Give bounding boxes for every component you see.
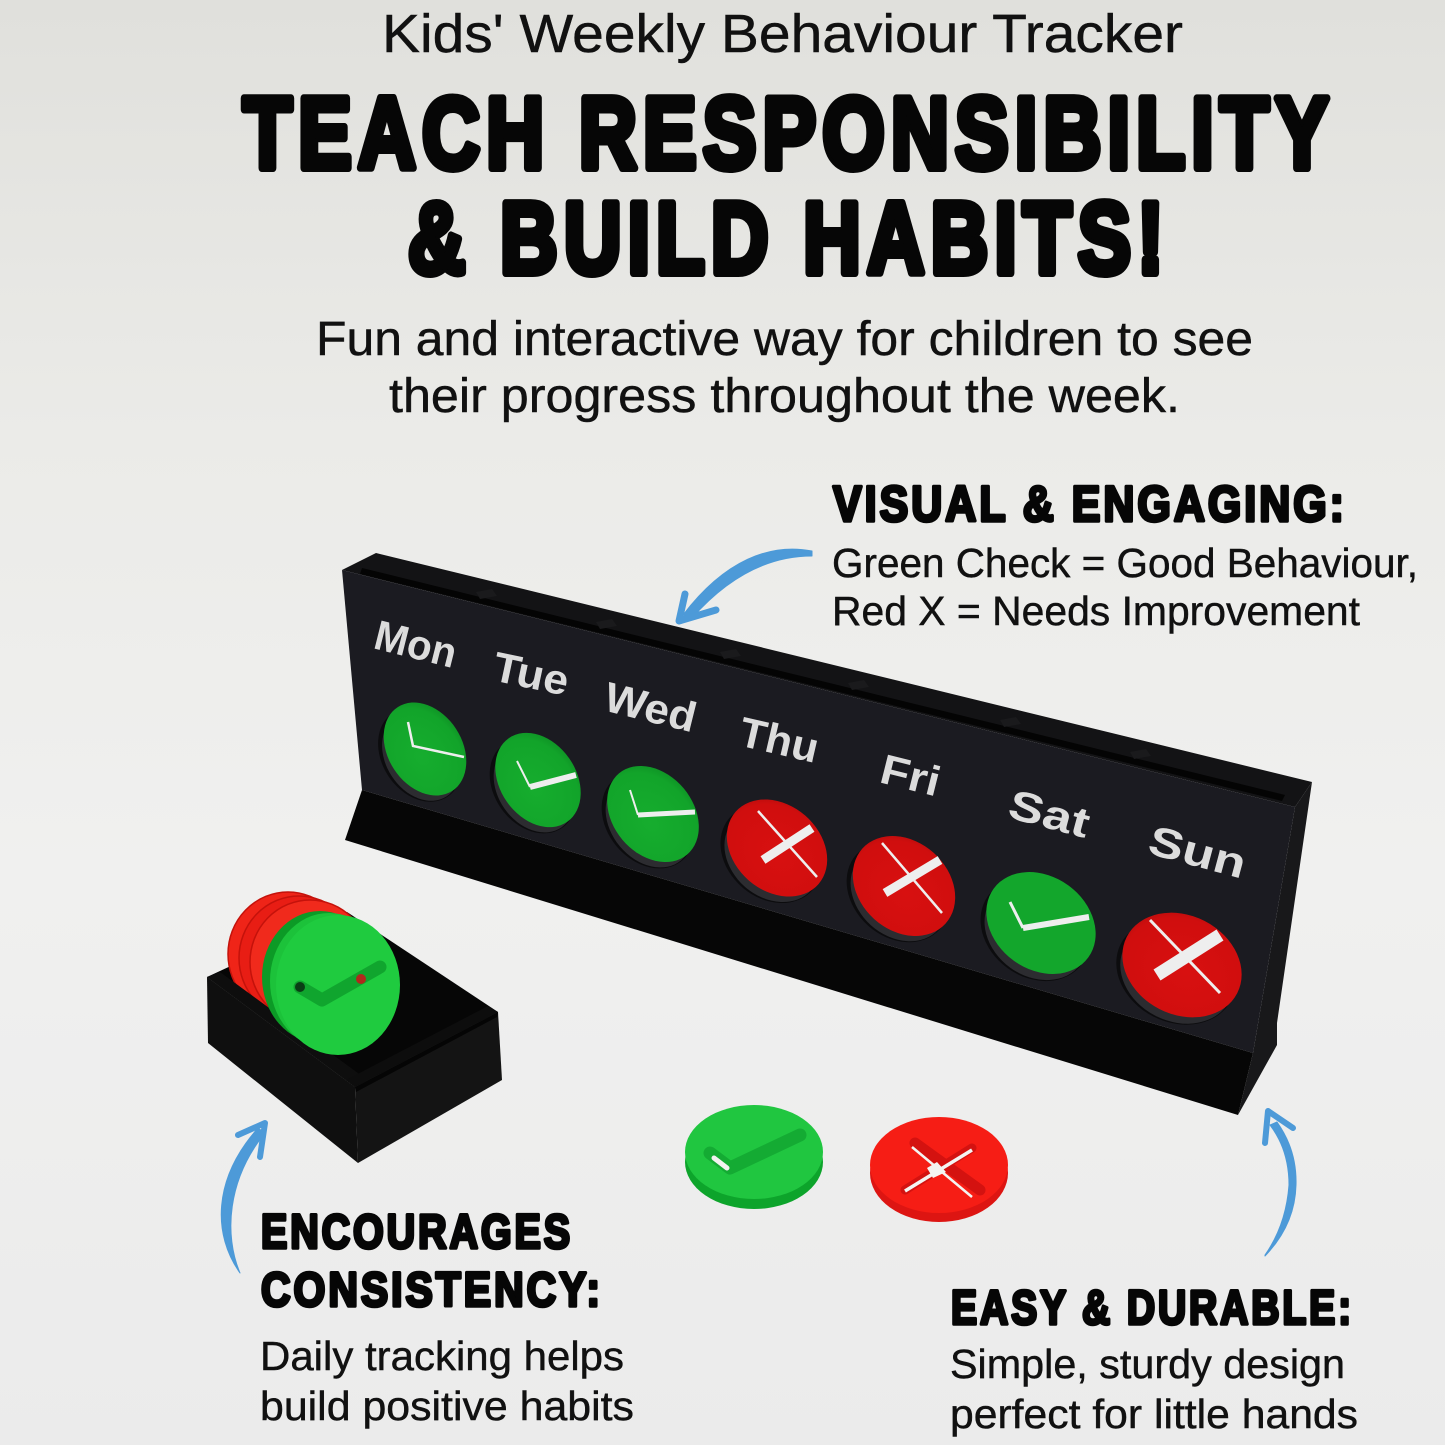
eyebrow heading: Kids' Weekly Behaviour Tracker (382, 4, 1183, 64)
main title (243, 78, 1335, 295)
disc: Tue check (472, 716, 598, 850)
green disc stack (262, 911, 400, 1055)
callout: easy and durable (950, 1282, 1358, 1437)
callout: visual and engaging: Red X = Needs Improvement (832, 588, 1361, 634)
subtitle: their progress throughout the week. (389, 370, 1180, 423)
arrow: to board top (679, 549, 812, 621)
callout: encourages consistency (260, 1206, 634, 1429)
token tray with stacked discs (207, 892, 502, 1163)
day labels: Sun (1144, 816, 1251, 887)
callout: visual and engaging: Green Check = Good Behaviour, (832, 540, 1418, 586)
disc: Sat check (960, 851, 1116, 1002)
day labels: Sat (1004, 780, 1095, 847)
day labels: Fri (876, 745, 945, 805)
subtitle: Fun and interactive way for children to see (316, 313, 1253, 366)
main title: & BUILD HABITS! (408, 183, 1170, 295)
disc: Fri cross (826, 815, 975, 963)
loose green check token (685, 1105, 823, 1209)
subtitle (316, 313, 1253, 423)
red disc stack (228, 892, 370, 1024)
callout: encourages consistency: CONSISTENCY: (261, 1264, 603, 1317)
callout: encourages consistency: build positive habits (260, 1383, 634, 1429)
callout: encourages consistency: Daily tracking helps (260, 1333, 624, 1379)
day labels: Wed (600, 673, 701, 741)
arrow: to tray (221, 1123, 265, 1273)
callout: easy and durable: EASY & DURABLE: (951, 1282, 1354, 1335)
day labels: Tue (489, 643, 573, 705)
disc: Thu cross (701, 779, 847, 923)
callout: visual and engaging (832, 476, 1418, 634)
day labels (370, 611, 1251, 887)
callout: easy and durable: Simple, sturdy design (950, 1341, 1345, 1387)
day labels: Mon (370, 611, 462, 677)
day labels: Thu (735, 708, 823, 772)
callout: encourages consistency: ENCOURAGES (261, 1206, 573, 1259)
disc: Wed check (583, 748, 718, 887)
tracker board (342, 553, 1312, 1115)
disc: Sun cross (1098, 893, 1260, 1045)
callout: easy and durable: perfect for little hands (950, 1391, 1358, 1437)
callout: visual and engaging: VISUAL & ENGAGING: (833, 476, 1347, 532)
disc: Mon check (361, 687, 483, 818)
loose red cross token (870, 1117, 1008, 1222)
arrow: to board base (1265, 1111, 1296, 1256)
